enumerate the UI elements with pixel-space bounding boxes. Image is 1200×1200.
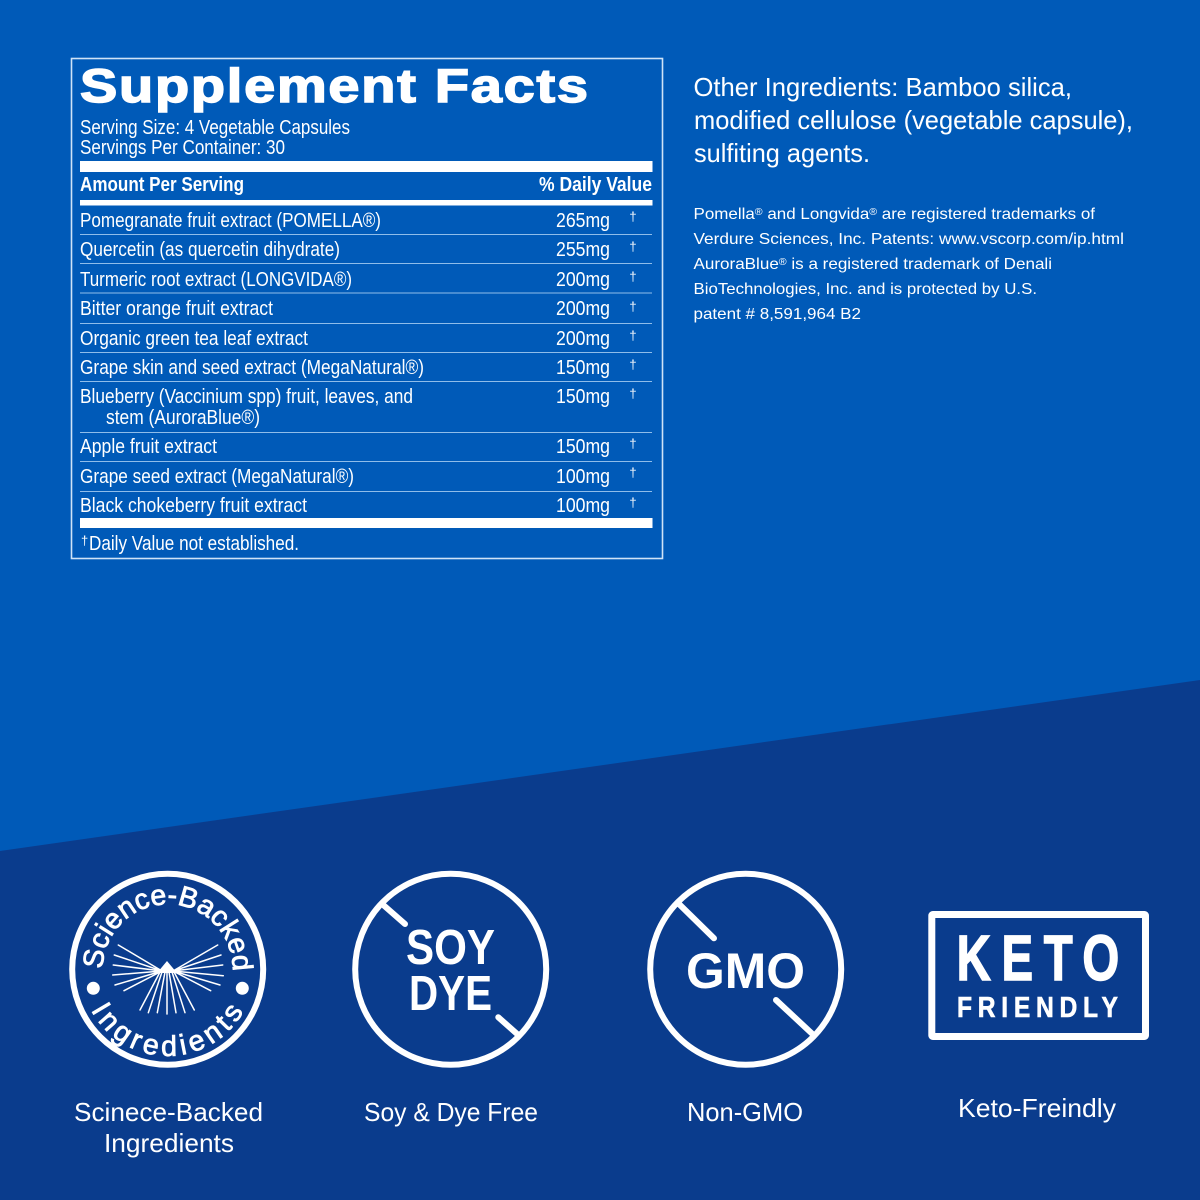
- label: science-backed ingredients: Ingredients: [104, 1128, 234, 1158]
- panel border: [72, 58, 662, 558]
- row: green tea: †: [629, 328, 637, 343]
- text block: trademark notes: and Longvida: [763, 206, 869, 223]
- icon: soy and dye free: SOY: [406, 921, 495, 975]
- text block: trademark notes: are registered trademarks of: [877, 206, 1096, 223]
- row: blueberry: stem (AuroraBlue®): [106, 406, 260, 429]
- table header: [80, 173, 652, 196]
- label: soy and dye free: Soy & Dye Free: [364, 1097, 538, 1127]
- icon: keto friendly: KETO: [957, 922, 1119, 994]
- row: grape skin and seed: 150mg: [556, 356, 610, 379]
- header rule: [80, 200, 652, 206]
- footnote: Daily Value not established.: [89, 532, 299, 555]
- text block: trademark notes: BioTechnologies, Inc. and is protected by U.S.: [694, 281, 1037, 298]
- row: blueberry: †: [629, 386, 637, 401]
- icon: non-GMO: [650, 874, 841, 1065]
- text block: trademark notes: [694, 206, 1124, 323]
- label: science-backed ingredients: Scinece-Backed: [74, 1097, 263, 1127]
- label: science-backed ingredients: [74, 1097, 263, 1158]
- row: green tea: [80, 327, 637, 350]
- label: keto-friendly: Keto-Freindly: [958, 1093, 1116, 1123]
- row: apple: [80, 435, 637, 458]
- table header: % Daily Value: [539, 173, 652, 196]
- row: bitter orange: 200mg: [556, 297, 610, 320]
- badge dots: [87, 982, 249, 995]
- text block: trademark notes: ®: [755, 207, 763, 218]
- row: turmeric: 200mg: [556, 268, 610, 291]
- row: blueberry: 150mg: [556, 385, 610, 408]
- row: grape seed: 100mg: [556, 465, 610, 488]
- row: quercetin: †: [629, 239, 637, 254]
- serving information: Serving Size: 4 Vegetable Capsules: [80, 116, 350, 139]
- serving information: Servings Per Container: 30: [80, 136, 285, 159]
- row: apple: †: [629, 436, 637, 451]
- row: grape skin and seed: Grape skin and seed extract (MegaNatural®): [80, 356, 424, 379]
- badge text: Ingredients: Ingredients: [92, 1002, 242, 1057]
- icon: non-GMO: GMO: [686, 943, 805, 999]
- bottom thick rule: [80, 518, 652, 528]
- background: dark blue diagonal band: [0, 680, 1200, 1200]
- row: grape seed: †: [629, 465, 637, 480]
- text block: trademark notes: is a registered trademark of Denali: [787, 256, 1052, 273]
- row: bitter orange: [80, 297, 637, 320]
- label: non-GMO: Non-GMO: [687, 1097, 803, 1127]
- row: green tea: 200mg: [556, 327, 610, 350]
- panel: supplement facts: [72, 58, 662, 558]
- row: green tea: Organic green tea leaf extract: [80, 327, 308, 350]
- icon: soy and dye free: DYE: [409, 967, 492, 1021]
- row: grape skin and seed: †: [629, 357, 637, 372]
- text block: trademark notes: Verdure Sciences, Inc. Patents: www.vscorp.com/ip.html: [694, 231, 1124, 248]
- icon: keto friendly: [932, 914, 1146, 1036]
- row: black chokeberry: †: [629, 495, 637, 510]
- row: quercetin: [80, 238, 637, 261]
- row: grape seed: Grape seed extract (MegaNatural®): [80, 465, 354, 488]
- badge rays: [113, 945, 223, 1014]
- row: pomegranate: 265mg: [556, 209, 610, 232]
- icon: keto friendly: FRIENDLY: [957, 991, 1118, 1023]
- text block: trademark notes: ®: [779, 257, 787, 268]
- row: grape seed: [80, 465, 637, 488]
- text block: other ingredients: [694, 72, 1133, 168]
- row: pomegranate: [80, 209, 637, 232]
- text block: trademark notes: patent # 8,591,964 B2: [694, 306, 861, 323]
- thick rule: [80, 161, 652, 172]
- row: turmeric: †: [629, 269, 637, 284]
- row: black chokeberry: Black chokeberry fruit extract: [80, 494, 307, 517]
- serving information: [80, 116, 350, 159]
- icon: soy and dye free: [355, 874, 546, 1065]
- text block: other ingredients: sulfiting agents.: [694, 138, 870, 168]
- heading: Supplement Facts: Supplement Facts: [80, 59, 588, 112]
- icon: science-backed badge: [69, 870, 266, 1068]
- row: blueberry: [80, 385, 637, 429]
- row: quercetin: Quercetin (as quercetin dihydrate): [80, 238, 340, 261]
- row: turmeric: Turmeric root extract (LONGVIDA®): [80, 268, 352, 291]
- text block: trademark notes: ®: [869, 207, 878, 218]
- row: bitter orange: †: [629, 299, 637, 314]
- table header: Amount Per Serving: [80, 173, 244, 196]
- row: turmeric: [80, 268, 637, 291]
- text block: trademark notes: AuroraBlue: [694, 256, 774, 273]
- row: black chokeberry: 100mg: [556, 494, 610, 517]
- row: blueberry: Blueberry (Vaccinium spp) fruit, leaves, and: [80, 385, 413, 408]
- row: quercetin: 255mg: [556, 238, 610, 261]
- text block: trademark notes: Pomella: [694, 206, 751, 223]
- row: black chokeberry: [80, 494, 637, 517]
- row: pomegranate: Pomegranate fruit extract (POMELLA®): [80, 209, 381, 232]
- text block: other ingredients: modified cellulose (vegetable capsule),: [694, 105, 1133, 135]
- badge text: Science-Backed: Science-Backed: [83, 886, 254, 970]
- row: bitter orange: Bitter orange fruit extract: [80, 297, 273, 320]
- footnote: †: [81, 533, 88, 548]
- row: apple: Apple fruit extract: [80, 435, 217, 458]
- row: apple: 150mg: [556, 435, 610, 458]
- text block: other ingredients: Other Ingredients: Bamboo silica,: [694, 72, 1072, 102]
- row: pomegranate: †: [629, 209, 637, 224]
